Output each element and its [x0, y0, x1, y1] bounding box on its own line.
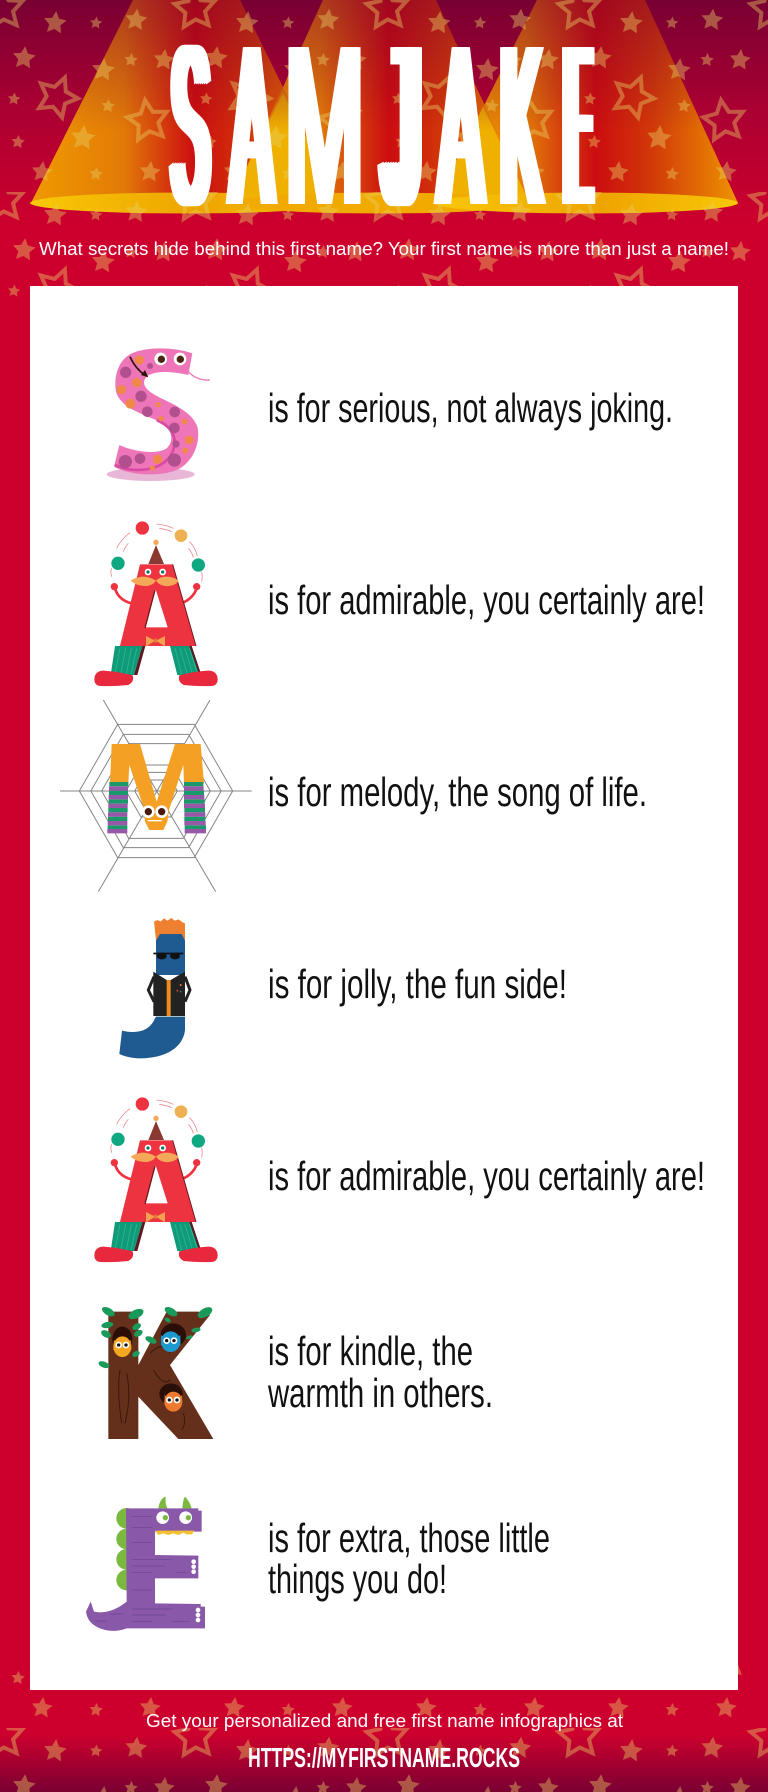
text: J line: is for jolly, the fun side! [268, 961, 567, 1007]
footer url: HTTPS://MYFIRSTNAME.ROCKS [248, 1742, 520, 1773]
title [168, 0, 596, 253]
title: M [285, 0, 364, 253]
spotlights [30, 0, 738, 214]
subtitle: What secrets hide behind this first name? Your first name is more than just a name! [39, 239, 729, 259]
icon: punk letter J [119, 918, 190, 1058]
icon: dragon letter E [86, 1497, 205, 1631]
title: A [231, 0, 272, 253]
text: E lines [268, 1515, 550, 1602]
panel: letters [30, 286, 738, 1690]
icon: clown letter A [94, 521, 218, 686]
text: E lines: is for extra, those little [268, 1515, 550, 1561]
title: S [172, 0, 209, 253]
text: K lines: warmth in others. [267, 1370, 493, 1416]
icon: clown letter A repeated [94, 1097, 218, 1262]
text: K lines [267, 1328, 493, 1416]
text: K lines: is for kindle, the [268, 1328, 473, 1374]
title: J [384, 0, 419, 253]
star pattern: top [0, 0, 768, 300]
star pattern: bottom [0, 1665, 768, 1792]
icon: tree letter K [98, 1305, 214, 1439]
icon: snake letter S [107, 348, 210, 481]
title: K [501, 0, 541, 253]
title: E [566, 0, 590, 253]
icon: spider web letter M [60, 700, 252, 892]
title: A [439, 0, 482, 253]
text: E lines: things you do! [268, 1556, 447, 1602]
footer text: Get your personalized and free first name infographics at [146, 1711, 623, 1731]
